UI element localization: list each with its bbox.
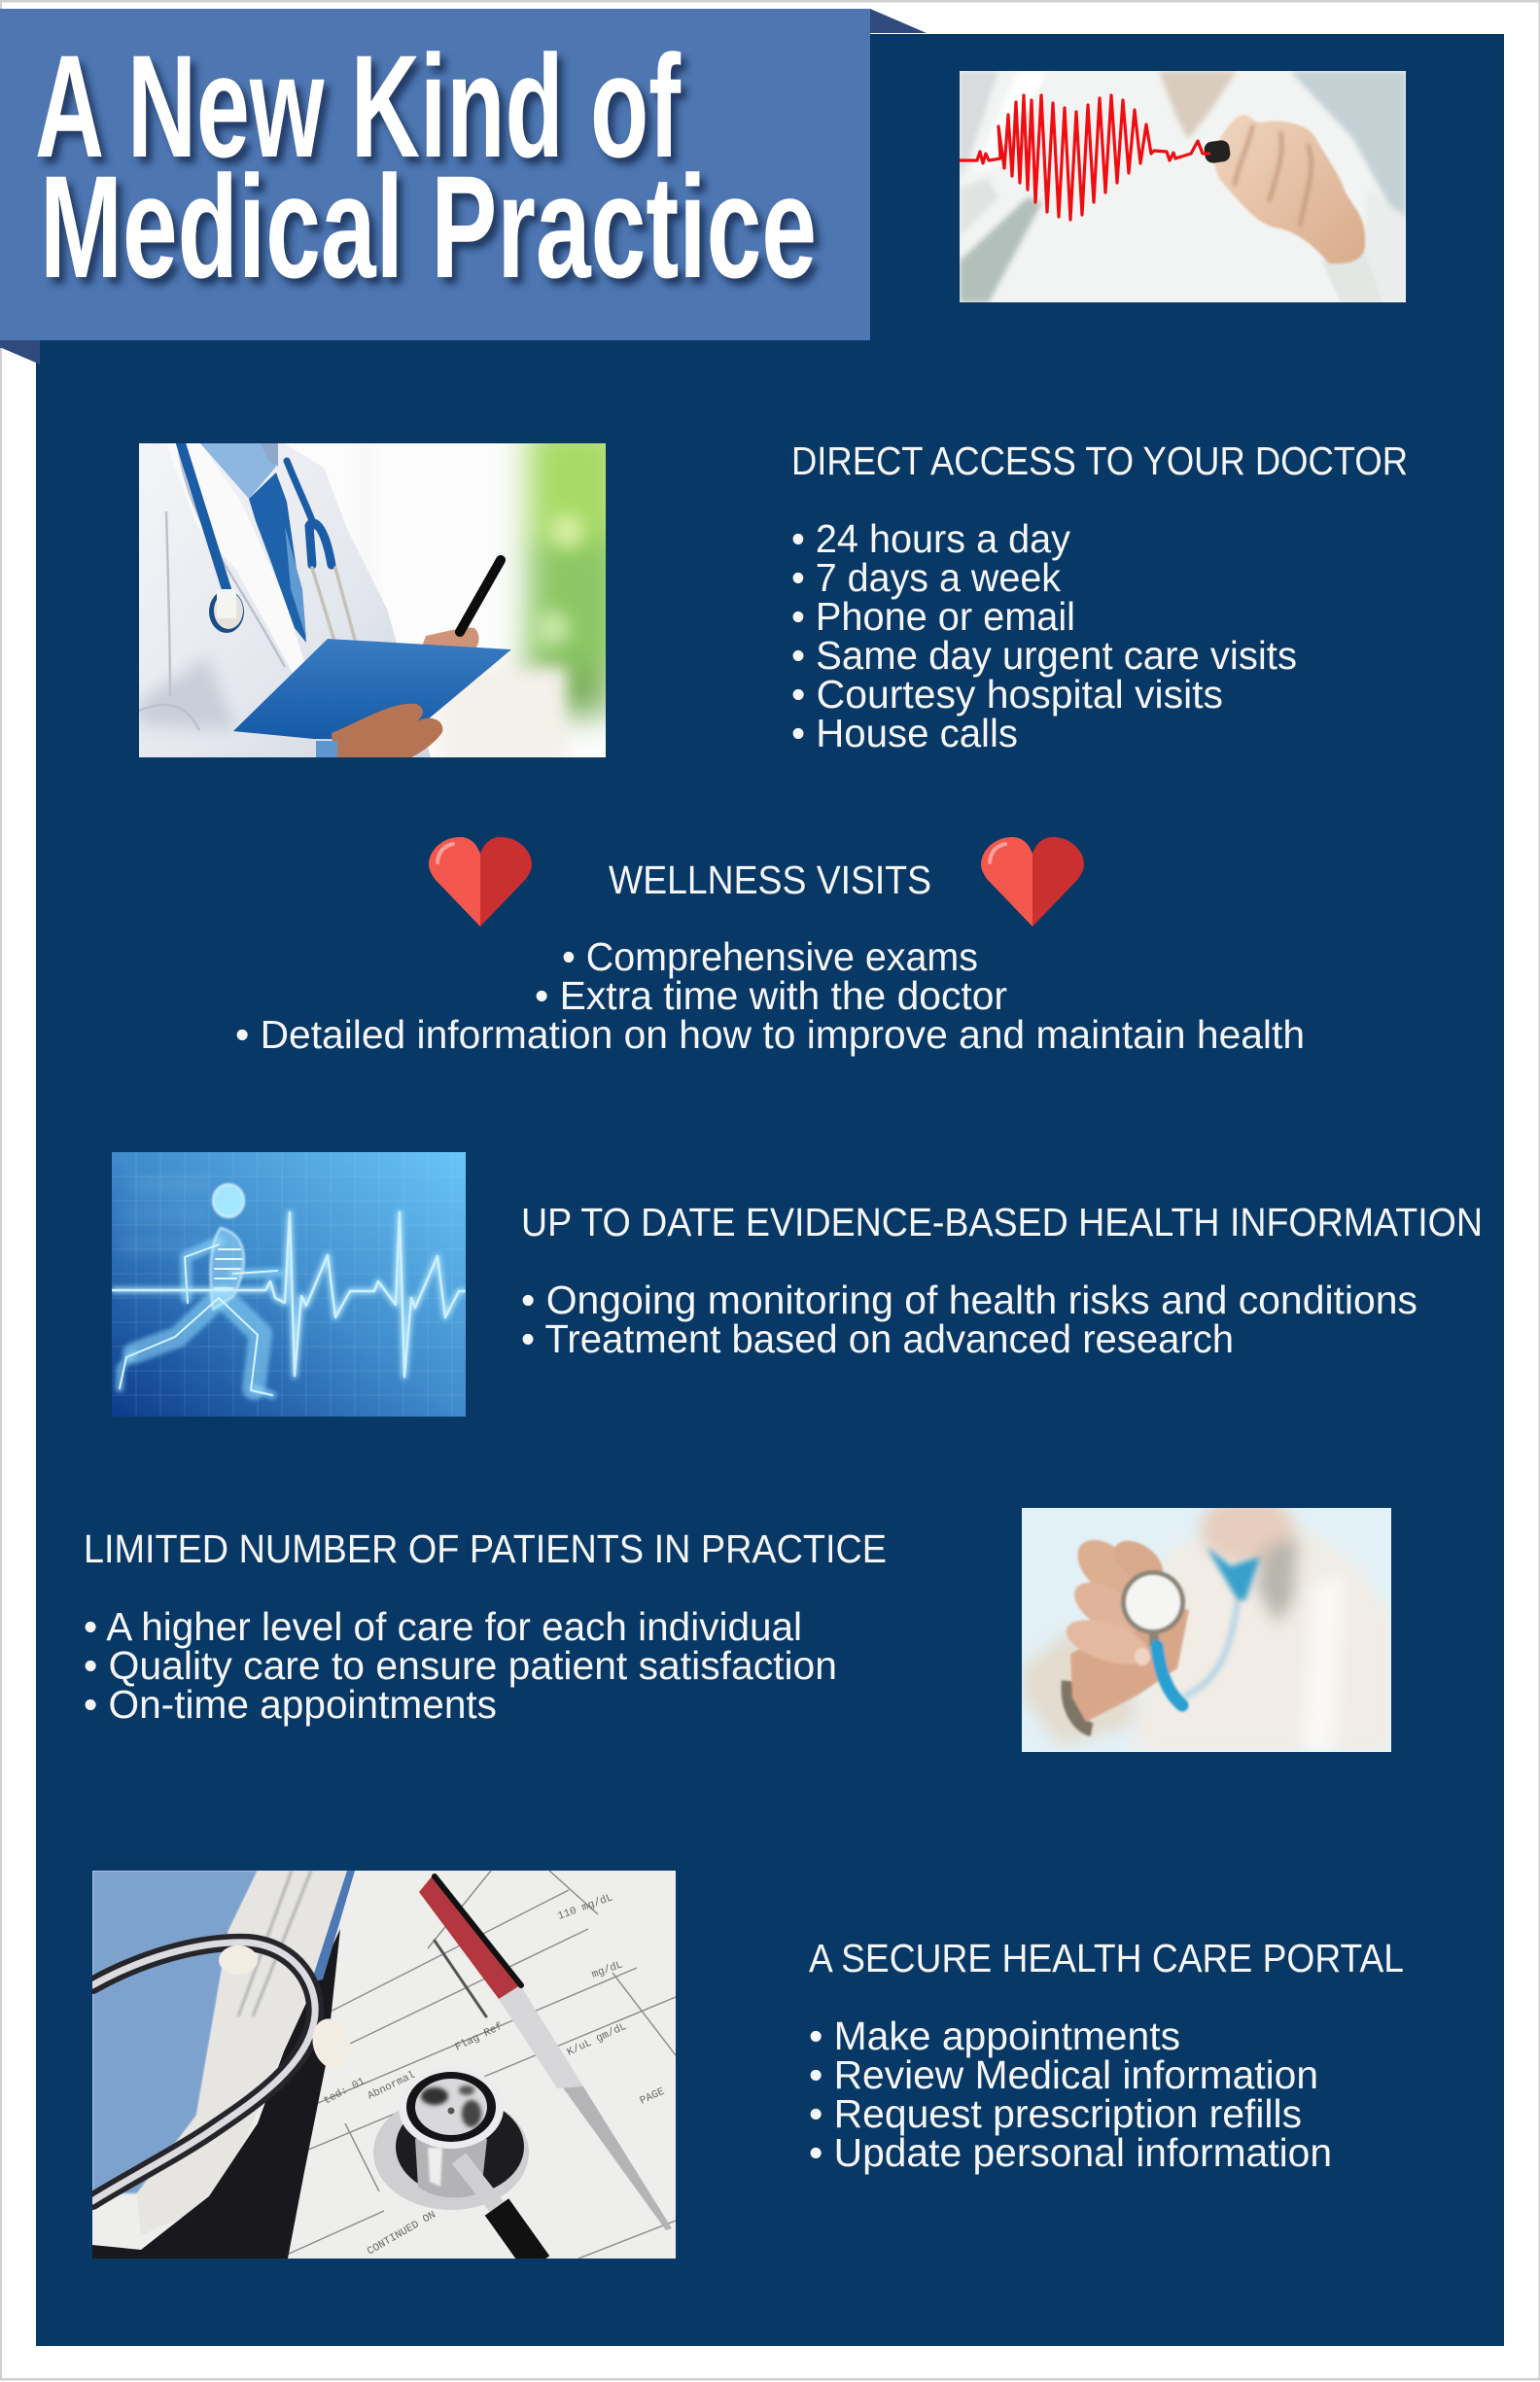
report text: CONTINUED ON bbox=[366, 2209, 438, 2258]
title: A New Kind of bbox=[35, 24, 682, 188]
runner figure bbox=[120, 1184, 279, 1395]
bullet list: evidence-based information: • Treatment based on advanced research bbox=[521, 1316, 1234, 1361]
hand bbox=[1213, 115, 1382, 302]
marker bbox=[1204, 139, 1231, 164]
bullet list: evidence-based information: • Ongoing monitoring of health risks and conditions bbox=[521, 1278, 1418, 1322]
report text: ted: 01 bbox=[322, 2076, 368, 2108]
ECG trace bbox=[112, 1212, 466, 1377]
bullet list: health care portal bbox=[809, 2014, 1332, 2175]
banner fold: top right bbox=[870, 9, 927, 33]
report text: PAGE bbox=[639, 2085, 667, 2108]
bullet list: direct access: • House calls bbox=[791, 711, 1018, 755]
bullet list: direct access: • 24 hours a day bbox=[791, 516, 1070, 561]
bullet list: health care portal: • Request prescription refills bbox=[809, 2091, 1302, 2136]
heading: evidence-based information: UP TO DATE EVIDENCE-BASED HEALTH INFORMATION bbox=[521, 1200, 1483, 1244]
blue folder bbox=[92, 1871, 258, 2193]
bullet list: direct access: • Courtesy hospital visits bbox=[791, 672, 1223, 717]
bullet list: direct access: • 7 days a week bbox=[791, 555, 1061, 600]
banner rectangle bbox=[0, 9, 870, 340]
heart ECG line bbox=[960, 95, 1210, 220]
bullet list: health care portal: • Update personal information bbox=[809, 2130, 1332, 2175]
photo: running skeleton with ECG line bbox=[112, 1152, 466, 1417]
icon: heart left bbox=[429, 837, 532, 927]
banner fold: bottom left bbox=[0, 340, 40, 365]
icon: heart right bbox=[981, 837, 1084, 927]
title banner bbox=[0, 9, 927, 365]
report text: 110 mg/dL bbox=[556, 1892, 614, 1923]
hands, pen, clipboard bbox=[421, 628, 479, 655]
lab coat bbox=[139, 443, 431, 757]
report text: mg/dL bbox=[590, 1959, 624, 1981]
white sheets bbox=[137, 1871, 355, 2235]
section text: limited patients bbox=[84, 1526, 887, 1727]
pen bbox=[419, 1875, 672, 2230]
bullet list: limited patients: • Quality care to ensure patient satisfaction bbox=[84, 1643, 837, 1688]
title: Medical Practice bbox=[40, 145, 817, 308]
photo: hand drawing heart ECG line bbox=[960, 71, 1406, 302]
title bbox=[35, 24, 817, 308]
heading: health care portal: A SECURE HEALTH CARE PORTAL bbox=[809, 1936, 1404, 1980]
bullet list: wellness visits bbox=[235, 934, 1305, 1057]
section text: evidence-based information bbox=[521, 1200, 1483, 1361]
bullet list: direct access bbox=[791, 516, 1297, 755]
hand bbox=[1061, 1529, 1189, 1730]
bullet list: limited patients bbox=[84, 1604, 837, 1727]
report text: Flag Ref bbox=[453, 2021, 505, 2054]
bullet list: direct access: • Same day urgent care visits bbox=[791, 633, 1297, 678]
photo: doctor with clipboard bbox=[139, 443, 606, 757]
bullet list: health care portal: • Review Medical information bbox=[809, 2052, 1318, 2097]
bullet list: evidence-based information bbox=[521, 1278, 1418, 1361]
bullet list: limited patients: • On-time appointments bbox=[84, 1682, 497, 1727]
bullet list: health care portal: • Make appointments bbox=[809, 2014, 1180, 2058]
bullet list: wellness visits: • Extra time with the doctor bbox=[535, 973, 1007, 1018]
bullet list: wellness visits: • Comprehensive exams bbox=[562, 934, 978, 979]
report text: Abnormal bbox=[366, 2070, 417, 2103]
black clipboard bbox=[92, 1929, 340, 2259]
photo: doctor holding stethoscope bbox=[1022, 1508, 1391, 1752]
shirt and tie bbox=[200, 443, 276, 499]
photo: stethoscope and pen on lab report bbox=[92, 1871, 676, 2259]
bullet list: wellness visits: • Detailed information on how to improve and maintain health bbox=[235, 1012, 1305, 1057]
section text: direct access bbox=[791, 438, 1408, 755]
heading: limited patients: LIMITED NUMBER OF PATIENTS IN PRACTICE bbox=[84, 1526, 887, 1571]
bullet list: direct access: • Phone or email bbox=[791, 594, 1075, 639]
stethoscope tube bbox=[92, 1943, 315, 2201]
stethoscope bbox=[181, 443, 355, 640]
bullet list: limited patients: • A higher level of care for each individual bbox=[84, 1604, 802, 1649]
report text bbox=[322, 1892, 667, 2258]
chest piece bbox=[373, 2067, 538, 2264]
section text: wellness visits bbox=[235, 858, 1305, 1057]
heading: direct access: DIRECT ACCESS TO YOUR DOCTOR bbox=[791, 438, 1408, 483]
section text: health care portal bbox=[809, 1936, 1404, 2175]
report text: K/uL gm/dL bbox=[566, 2021, 629, 2059]
report lines bbox=[287, 1871, 676, 2259]
heading: wellness visits: WELLNESS VISITS bbox=[609, 858, 931, 902]
